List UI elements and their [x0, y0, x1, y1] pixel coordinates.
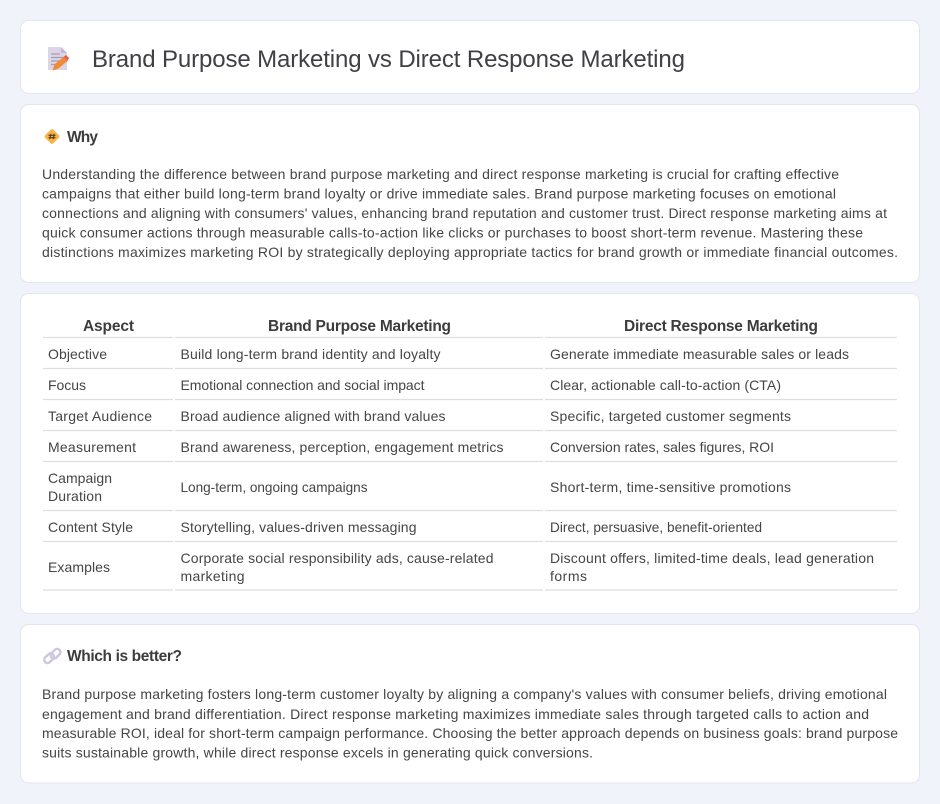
- table header row: Aspect: [83, 318, 134, 335]
- row: content style: Content Style: [48, 519, 133, 535]
- icon: link: [43, 648, 62, 664]
- row: content style: Storytelling, values-driven messaging: [180, 519, 416, 535]
- row: target audience: Broad audience aligned with brand values: [180, 408, 446, 424]
- row: focus: Focus: [48, 377, 86, 393]
- row: examples: [48, 550, 874, 584]
- row: campaign duration: Short-term, time-sensitive promotions: [550, 479, 791, 495]
- row: campaign duration: Duration: [48, 488, 102, 504]
- row: measurement: Brand awareness, perception, engagement metrics: [180, 439, 504, 455]
- text block: why paragraph: campaigns that either build long-term brand loyalty or drive immediate sales. Brand purpose marketing focuses on emotional: [42, 186, 836, 202]
- text block: which is better paragraph: Brand purpose marketing fosters long-term customer loyalty by aligning a company's values with consumer beliefs, driving emotional: [42, 686, 887, 702]
- row: focus: [48, 377, 781, 393]
- panel: why: [20, 104, 920, 282]
- row: focus: Clear, actionable call-to-action (CTA): [550, 377, 781, 393]
- row: examples: marketing: [180, 568, 244, 584]
- row: campaign duration: [48, 470, 791, 504]
- row: examples: forms: [550, 568, 587, 584]
- row: focus: Emotional connection and social impact: [180, 377, 425, 393]
- text block: why paragraph: distinctions maximizes marketing ROI by strategically deploying appropriate tactics for brand growth or immediate financial outcomes.: [42, 244, 898, 260]
- heading: which is better: Which is better?: [67, 648, 182, 665]
- text block: which is better paragraph: engagement and brand differentiation. Direct response marketing maximizes immediate sales through targeted calls to action and: [42, 706, 869, 722]
- panel: which is better: [20, 624, 920, 783]
- row: objective: [48, 346, 849, 362]
- row: target audience: [48, 408, 791, 424]
- row: objective: Build long-term brand identity and loyalty: [180, 346, 440, 362]
- text block: why paragraph: connections and aligning with consumers' values, enhancing brand reputation and customer trust. Direct response marketing aims at: [42, 205, 887, 221]
- text block: why paragraph: quick consumer actions through measurable calls-to-action like clicks or purchases to boost short-term revenue. Mastering these: [42, 224, 863, 240]
- row: target audience: Target Audience: [48, 408, 152, 424]
- text block: why paragraph: Understanding the difference between brand purpose marketing and direct response marketing is crucial for crafting effective: [42, 166, 839, 182]
- icon: document with pencil: [48, 47, 69, 70]
- row: examples: Discount offers, limited-time deals, lead generation: [550, 550, 874, 566]
- row: objective: Generate immediate measurable sales or leads: [550, 346, 849, 362]
- row: campaign duration: Campaign: [48, 470, 112, 486]
- row: objective: Objective: [48, 346, 107, 362]
- row: measurement: Measurement: [48, 439, 136, 455]
- table header row: Brand Purpose Marketing: [268, 318, 451, 335]
- row: measurement: [48, 439, 774, 455]
- table header row: Direct Response Marketing: [624, 318, 818, 335]
- text block: which is better paragraph: [42, 686, 898, 760]
- row: target audience: Specific, targeted customer segments: [550, 408, 791, 424]
- icon: orange diamond: [44, 128, 60, 145]
- text block: why paragraph: [42, 166, 898, 260]
- row: measurement: Conversion rates, sales figures, ROI: [550, 439, 774, 455]
- text block: which is better paragraph: suits sustainable growth, while direct response excels in generating quick conversions.: [42, 744, 593, 760]
- row: campaign duration: Long-term, ongoing campaigns: [180, 480, 368, 495]
- title: Brand Purpose Marketing vs Direct Response Marketing: [92, 46, 685, 73]
- table header row: [83, 318, 818, 335]
- panel: comparison table: [20, 294, 920, 614]
- text block: which is better paragraph: measurable ROI, ideal for short-term campaign performance. Choosing the better approach depends on business goals: brand purpose: [42, 725, 898, 741]
- panel: header: [20, 20, 920, 94]
- row: content style: [48, 519, 762, 535]
- heading: why: Why: [67, 129, 98, 146]
- row: content style: Direct, persuasive, benefit-oriented: [550, 520, 762, 535]
- row: examples: Examples: [48, 559, 110, 575]
- row: examples: Corporate social responsibility ads, cause-related: [180, 550, 494, 566]
